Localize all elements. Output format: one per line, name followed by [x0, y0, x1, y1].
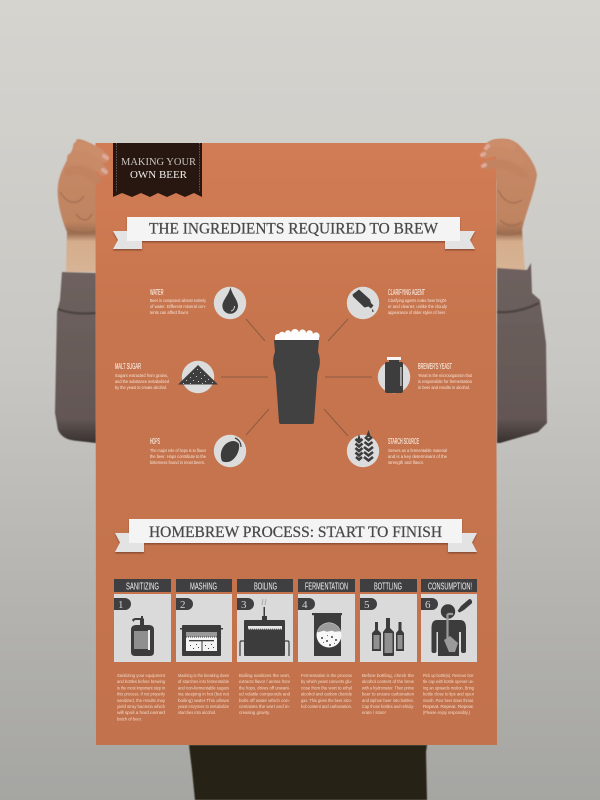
step 2: mashing: starches into alcohol. — [178, 710, 216, 716]
person: left arm and hand — [55, 139, 100, 443]
step 4: fermentation: by which yeast converts glu- — [301, 679, 352, 685]
ingredient: water: Beer is composed almost entirely — [150, 298, 206, 304]
step 4: fermentation: hol content and carbonation. — [301, 704, 352, 710]
ingredient: hops: bitterness found in most beers. — [150, 460, 205, 466]
ingredient: starch source: Serves as a fermentable material — [388, 448, 447, 454]
step 4: fermentation: gas. This gives the beer alco- — [301, 698, 352, 704]
step 6: consumption: mouth. Pour beer down throat. — [423, 698, 474, 704]
ingredient: malt sugar: by the yeast to create alcohol. — [115, 385, 167, 391]
step 4: fermentation: FERMENTATION — [305, 580, 348, 592]
step 3: boiling: centrates the wort and in- — [239, 704, 290, 710]
step 2: mashing: of starches into fermentable — [178, 679, 229, 685]
ingredient: clarifying agent: CLARIFYING AGENT — [388, 287, 425, 297]
step 6: consumption: ing an upwards motion. Bring — [423, 685, 474, 691]
step 1: sanitizing: is the most important step in — [117, 685, 165, 691]
step 1: sanitizing: SANITIZING — [126, 580, 159, 592]
step 3: boiling: ed volatile compounds and — [239, 692, 290, 698]
step 1: sanitizing: yield stray bacteria which — [117, 704, 165, 710]
step 2: mashing: yeast enzymes to metabolize — [178, 704, 229, 710]
ingredient: brewer's yeast — [378, 357, 472, 393]
step 2: mashing: 2 — [180, 599, 186, 611]
step 5: bottling: with a hydrometer. Then prime — [362, 685, 414, 691]
step 1: sanitizing — [114, 579, 171, 722]
step 6: consumption: Repeat. Repeat. Repeat. — [423, 704, 474, 710]
step 6: consumption: (Please enjoy responsibly.) — [423, 710, 470, 716]
heading banner: ingredients: THE INGREDIENTS REQUIRED TO BREW — [149, 220, 438, 238]
ingredient: clarifying agent: appearance of older styles of beer. — [388, 310, 446, 316]
step 3: boiling: extracts flavor / aroma from — [239, 679, 290, 685]
step 6: consumption — [421, 579, 477, 716]
step 1: sanitizing: sanitized, the results may — [117, 698, 165, 704]
step 5: bottling — [360, 579, 417, 716]
ingredient: clarifying agent — [347, 287, 447, 319]
ingredient: malt sugar: Sugars extracted from grains, — [115, 373, 168, 379]
person: left fingers over poster — [68, 146, 107, 180]
step 5: bottling: BOTTLING — [374, 580, 402, 592]
step 6: consumption: bottle close to lips and open — [423, 692, 474, 698]
step 2: mashing: via steeping in hot (but not — [178, 692, 230, 698]
person: right arm and hand — [488, 139, 547, 443]
step 2: mashing — [176, 579, 232, 716]
ingredient: brewer's yeast: is responsible for fermentation — [418, 379, 472, 385]
person: right fingers over poster — [482, 143, 524, 176]
ingredient: malt sugar: MALT SUGAR — [115, 361, 141, 371]
ingredient: starch source: and is a key determinant of the — [388, 454, 447, 460]
ingredient: hops: the beer. Hops contribute to the — [150, 454, 206, 460]
ingredient: starch source — [347, 430, 447, 467]
step 4: fermentation: Fermentation is the process — [301, 673, 352, 679]
step 5: bottling: alcohol content of the brew — [362, 679, 414, 685]
badge: making your own beer — [113, 143, 202, 197]
step 1: sanitizing: 1 — [118, 599, 124, 611]
ingredient: water: tents can affect flavor. — [150, 310, 189, 316]
step 6: consumption: tle cap with bottle opener us- — [423, 679, 474, 685]
step 3: boiling: BOILING — [254, 580, 277, 592]
ingredient: starch source: strength and flavor. — [388, 460, 424, 466]
step 1: sanitizing: batch of beer. — [117, 716, 142, 722]
step 3: boiling: boils off water which con- — [239, 698, 290, 704]
step 4: fermentation: alcohol and carbon dioxide — [301, 692, 352, 698]
step 1: sanitizing: Sanitizing your equipment — [117, 673, 166, 679]
step 4: fermentation: 4 — [302, 599, 308, 611]
step 4: fermentation — [298, 579, 355, 710]
connector lines to the glass — [221, 319, 372, 436]
step 3: boiling — [237, 579, 293, 716]
ingredient: water — [150, 287, 246, 319]
ingredient: malt sugar: and the substance metabolized — [115, 379, 169, 385]
step 3: boiling: Boiling sanitizes the wort, — [239, 673, 290, 679]
ingredient: brewer's yeast: in beer and results in alcohol. — [418, 385, 470, 391]
step 3: boiling: the hops, drives off unwant- — [239, 685, 290, 691]
ingredient: hops: The major role of hops is to flavor — [150, 448, 206, 454]
badge: making your own beer: OWN BEER — [130, 169, 188, 181]
poster sheet — [96, 143, 497, 745]
step 5: bottling: 5 — [364, 599, 370, 611]
step 6: consumption: Pick up bottle(s). Remove bot- — [423, 673, 474, 679]
step 4: fermentation: cose from the wort to ethyl — [301, 685, 352, 691]
step 6: consumption: 6 — [425, 599, 431, 611]
ingredient: clarifying agent: er and cleaner, unlike the cloudy — [388, 304, 447, 310]
step 5: bottling: Before bottling, check the — [362, 673, 414, 679]
step 5: bottling: erate / store! — [362, 710, 386, 716]
person: trousers — [189, 745, 427, 800]
ingredient: water: WATER — [150, 287, 164, 297]
icon: beer glass — [273, 329, 320, 424]
step 3: boiling: 3 — [241, 599, 247, 611]
ingredient: clarifying agent: Clarifying agents make beer bright- — [388, 298, 447, 304]
step 5: bottling: and siphon beer into bottles. — [362, 698, 414, 704]
ingredient: brewer's yeast: Yeast is the microorganism that — [418, 373, 472, 379]
step 2: mashing: MASHING — [190, 580, 217, 592]
step 2: mashing: and non-fermentable sugars — [178, 685, 229, 691]
step 2: mashing: boiling) water.This allows — [178, 698, 230, 704]
heading banner: homebrew process: HOMEBREW PROCESS: START TO FINISH — [149, 524, 442, 541]
step 5: bottling: beer to ensure carbonation — [362, 692, 414, 698]
step 1: sanitizing: this process. If not properly — [117, 692, 165, 698]
ingredient: water: of water. Different mineral con- — [150, 304, 206, 310]
step 1: sanitizing: will spoil a hard earned — [117, 710, 165, 716]
heading banner: homebrew process — [115, 519, 477, 552]
ingredient: hops: HOPS — [150, 436, 160, 446]
ingredient: brewer's yeast: BREWER'S YEAST — [418, 361, 452, 371]
step 2: mashing: Mashing is the breaking down — [178, 673, 229, 679]
step 6: consumption: CONSUMPTION! — [428, 580, 472, 592]
step 3: boiling: creasing gravity. — [239, 710, 270, 716]
ingredient: malt sugar — [115, 361, 218, 393]
step 1: sanitizing: and bottles before brewing — [117, 679, 165, 685]
heading banner: ingredients — [113, 217, 475, 249]
step 5: bottling: Cap those bottles and refridg- — [362, 704, 414, 710]
ingredient: starch source: STARCH SOURCE — [388, 436, 419, 446]
ingredient: hops — [150, 435, 246, 467]
badge: making your own beer: MAKING YOUR — [121, 156, 197, 168]
